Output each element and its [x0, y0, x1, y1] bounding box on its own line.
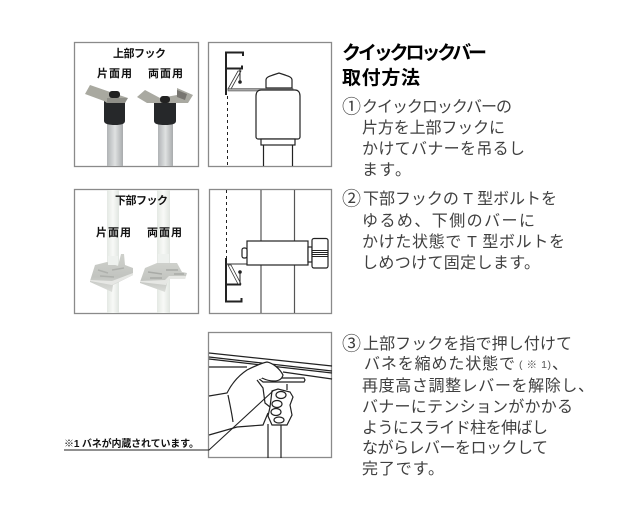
photo: double-sided upper hook	[137, 88, 193, 166]
panel: upper hook photo	[74, 42, 198, 166]
label: double-sided upper: 両面用	[148, 67, 183, 80]
text block: step 1: ます。	[362, 161, 411, 179]
photo: single-sided upper hook	[85, 85, 128, 166]
text block: step 2: 下部フックの T 型ボルトを	[363, 190, 557, 208]
bar pole	[268, 424, 281, 458]
text block: step 3: 上部フックを指で押し付けて	[363, 335, 572, 353]
fist	[268, 389, 293, 425]
text block: step 3: バネを縮めた状態で	[364, 355, 515, 373]
callout: spring note	[64, 391, 273, 450]
heading: lower hook: 下部フック	[115, 193, 168, 207]
bar clamp body	[256, 90, 300, 139]
heading: upper hook: 上部フック	[113, 46, 166, 60]
text block: step 3: ③	[342, 333, 361, 355]
bar collar	[261, 139, 295, 145]
text block: step 3	[342, 333, 594, 478]
T-bolt knob	[312, 238, 328, 268]
text block: step 3: ( ※ 1)	[519, 359, 551, 371]
text block: step 1: クイックロックバーの	[362, 98, 512, 116]
pole right	[157, 190, 170, 313]
text block: step 1: ①	[342, 96, 361, 118]
clamp body	[247, 241, 308, 265]
horizontal arm	[228, 88, 293, 91]
photo: double-sided lower hook	[140, 254, 187, 292]
text block: step 1: かけてバナーを吊るし	[362, 140, 525, 158]
text block: step 3: バナーにテンションがかかる	[362, 398, 573, 416]
panel: lower hook photo	[74, 190, 198, 314]
title	[342, 42, 487, 89]
panel: hand diagram	[208, 332, 332, 458]
panel: lower hook diagram	[210, 190, 332, 314]
hook bracket	[226, 52, 243, 95]
bar pole	[261, 190, 294, 313]
label: single-sided upper: 片面用	[97, 66, 132, 80]
text block: step 2: しめつけて固定します。	[362, 254, 540, 272]
text block: step 1: 片方を上部フックに	[362, 119, 505, 137]
fingers	[271, 392, 286, 423]
small bolt nub	[242, 248, 247, 258]
label: double-sided lower: 両面用	[147, 226, 182, 239]
bar head	[266, 73, 292, 88]
photo: single-sided lower hook	[90, 254, 133, 292]
text block: step 2	[342, 188, 565, 272]
text block: step 2: ②	[342, 188, 361, 210]
text block: step 2: ゆるめ、下側のバーに	[362, 212, 535, 230]
pole left	[107, 190, 119, 313]
dashed line	[226, 190, 228, 258]
bracket	[226, 258, 246, 302]
title: クイックロックバー	[342, 42, 487, 64]
hand illustration	[209, 362, 293, 435]
text block: step 3: 完了です。	[362, 460, 444, 478]
text block: step 3: ながらレバーをロックして	[362, 439, 548, 457]
text block: step 1	[342, 96, 525, 179]
text block: step 3: ようにスライド柱を伸ばし	[362, 419, 548, 437]
T-bolt shaft	[308, 247, 312, 262]
bar pole	[264, 145, 292, 166]
text block: step 3: 、	[552, 356, 568, 373]
label: single-sided lower: 片面用	[96, 225, 131, 239]
handle plate	[258, 378, 305, 382]
title: 取付方法	[342, 66, 420, 89]
rail	[209, 353, 332, 379]
text block: step 2: かけた状態で T 型ボルトを	[362, 233, 565, 251]
dashed line	[226, 96, 228, 166]
text block: step 3: 再度高さ調整レバーを解除し、	[362, 377, 594, 395]
panel: upper hook diagram	[208, 42, 332, 166]
callout: spring note: ※1 バネが内蔵されています。	[64, 437, 199, 450]
